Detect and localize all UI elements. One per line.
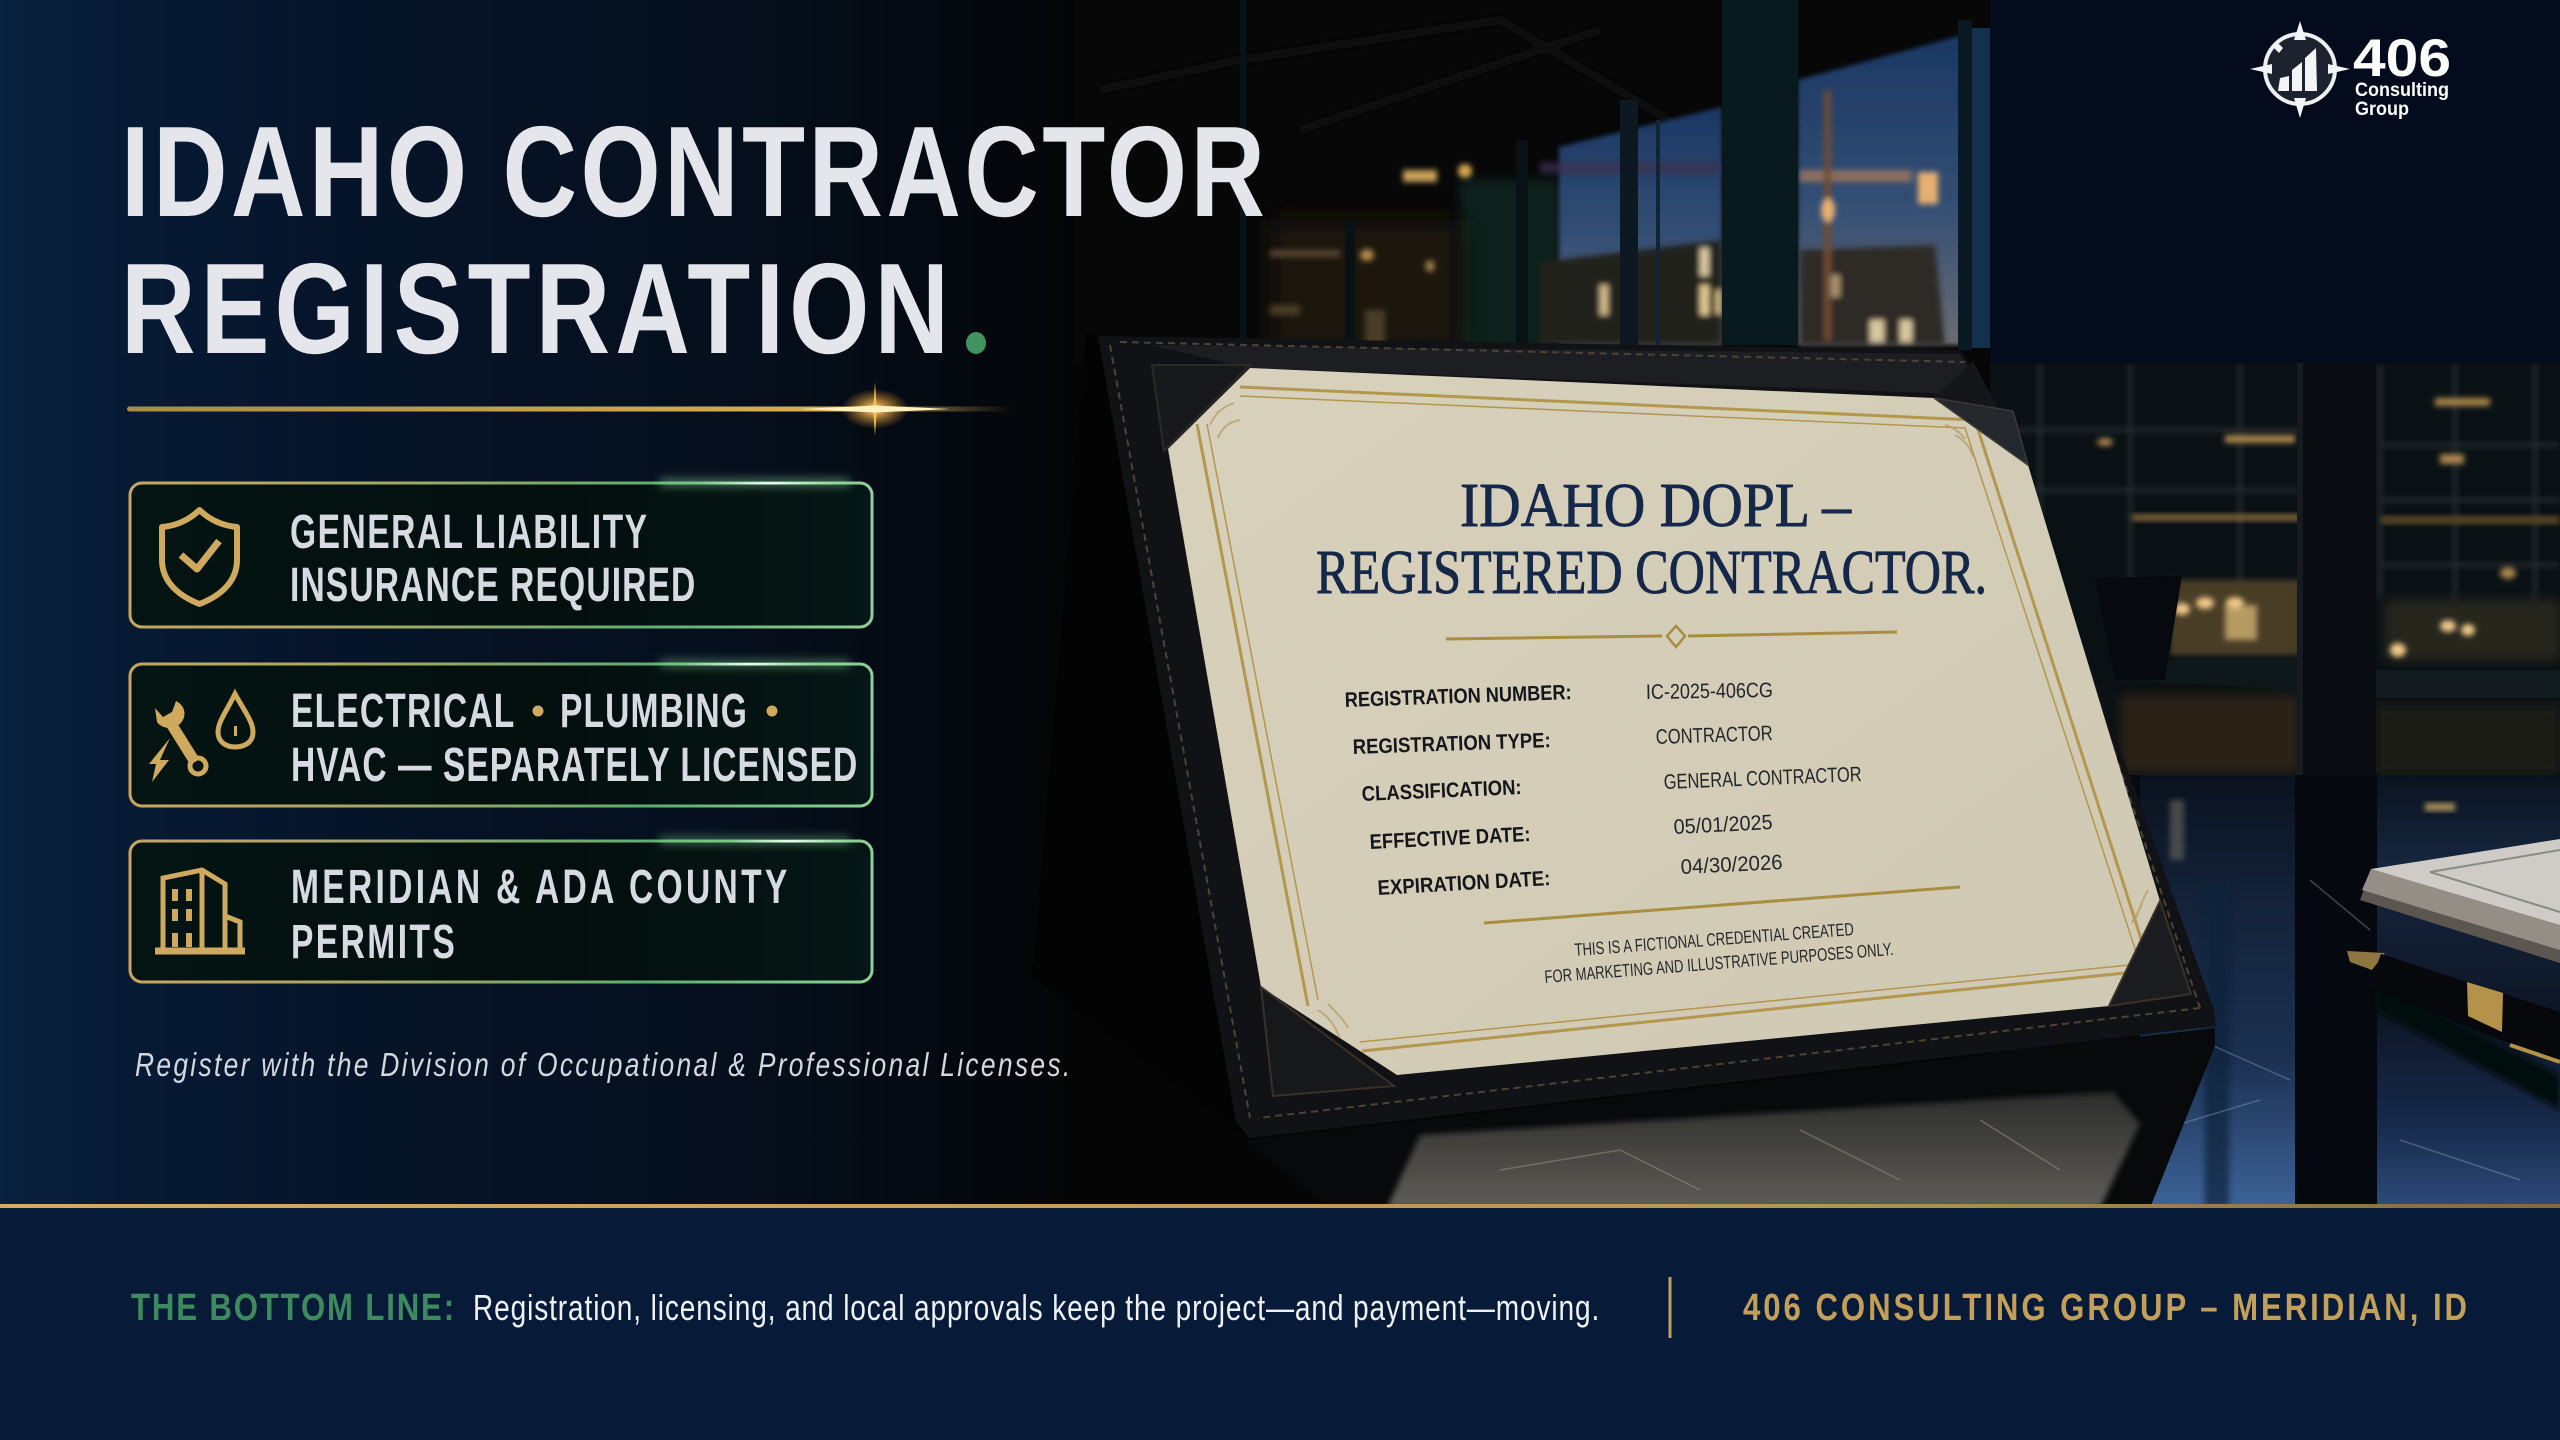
certificate title: IDAHO DOPL –	[1460, 472, 1852, 540]
certificate title: REGISTERED CONTRACTOR.	[1316, 539, 1987, 607]
background photo: upper windows with crane	[1075, 0, 1990, 363]
logo wordmark: 406	[2353, 29, 2451, 88]
permits text: MERIDIAN & ADA COUNTY	[291, 859, 787, 913]
panel: local permits	[130, 838, 872, 982]
leather corners	[1152, 365, 1250, 451]
bottom line label: THE BOTTOM LINE:	[131, 1287, 454, 1329]
chair	[2095, 576, 2182, 680]
gold border lines	[1197, 387, 2152, 1051]
logo compass	[2250, 21, 2350, 118]
icon: building	[155, 870, 245, 951]
title: REGISTRATION	[121, 236, 949, 381]
top right navy panel	[1990, 0, 2560, 363]
general liability text: GENERAL LIABILITY	[290, 504, 647, 558]
registration values: GENERAL CONTRACTOR	[1663, 763, 1862, 794]
registration details: REGISTRATION NUMBER:	[1344, 681, 1572, 712]
title: IDAHO CONTRACTOR	[121, 99, 1265, 244]
registration details	[1344, 681, 1572, 900]
certificate in leather binder	[1030, 332, 2216, 1138]
icon: shield	[162, 510, 237, 604]
disclaimer: THIS IS A FICTIONAL CREDENTIAL CREATED	[1574, 919, 1855, 960]
icon: tools and drop	[149, 694, 253, 782]
company location: 406 CONSULTING GROUP – MERIDIAN, ID	[1743, 1287, 2467, 1329]
trades text: PLUMBING	[560, 683, 747, 737]
binder front	[1098, 336, 2216, 1138]
panel: general liability	[130, 480, 872, 627]
papers on the table	[2360, 839, 2560, 963]
corner ornaments	[1210, 403, 2148, 1038]
registration values: 05/01/2025	[1673, 811, 1773, 839]
logo wordmark: Consulting	[2355, 80, 2449, 101]
registration values	[1646, 679, 1862, 879]
disclaimer: FOR MARKETING AND ILLUSTRATIVE PURPOSES ONLY.	[1544, 939, 1894, 987]
pen on the table	[2347, 951, 2560, 1064]
registration details: EFFECTIVE DATE:	[1369, 823, 1531, 854]
registration values: IC-2025-406CG	[1646, 679, 1773, 704]
trades text	[291, 683, 857, 791]
logo wordmark	[2353, 29, 2451, 120]
logo wordmark: Group	[2355, 99, 2409, 120]
binder back fold	[1030, 332, 1248, 1138]
title rule with flare	[127, 382, 1012, 436]
registration details: EXPIRATION DATE:	[1377, 867, 1551, 900]
background photo: lower right interior with lit windows	[1990, 363, 2560, 793]
registration values: CONTRACTOR	[1655, 722, 1773, 749]
logo	[2250, 21, 2451, 120]
paper	[1168, 368, 2160, 1075]
registration details: CLASSIFICATION:	[1361, 776, 1522, 806]
trades text: HVAC — SEPARATELY LICENSED	[291, 737, 857, 791]
general liability text	[290, 504, 695, 611]
registration values: 04/30/2026	[1680, 851, 1783, 879]
registration details: REGISTRATION TYPE:	[1352, 729, 1551, 759]
permits text: PERMITS	[291, 914, 455, 968]
panel: trades licensing	[130, 661, 872, 806]
certificate divider	[1446, 626, 1897, 647]
footer band	[0, 1204, 2560, 1440]
disclaimer	[1544, 919, 1894, 987]
title period	[966, 332, 986, 354]
marble table surface	[1990, 775, 2560, 1208]
bottom line text: Registration, licensing, and local approvals keep the project—and payment—moving.	[473, 1288, 1599, 1328]
permits text	[291, 859, 787, 968]
certificate title	[1316, 472, 1987, 607]
reflection of certificate binder	[1245, 1028, 2215, 1208]
title	[121, 99, 1265, 381]
general liability text: INSURANCE REQUIRED	[290, 557, 695, 611]
register note: Register with the Division of Occupational & Professional Licenses.	[135, 1047, 1070, 1084]
trades text: ELECTRICAL	[291, 683, 514, 737]
